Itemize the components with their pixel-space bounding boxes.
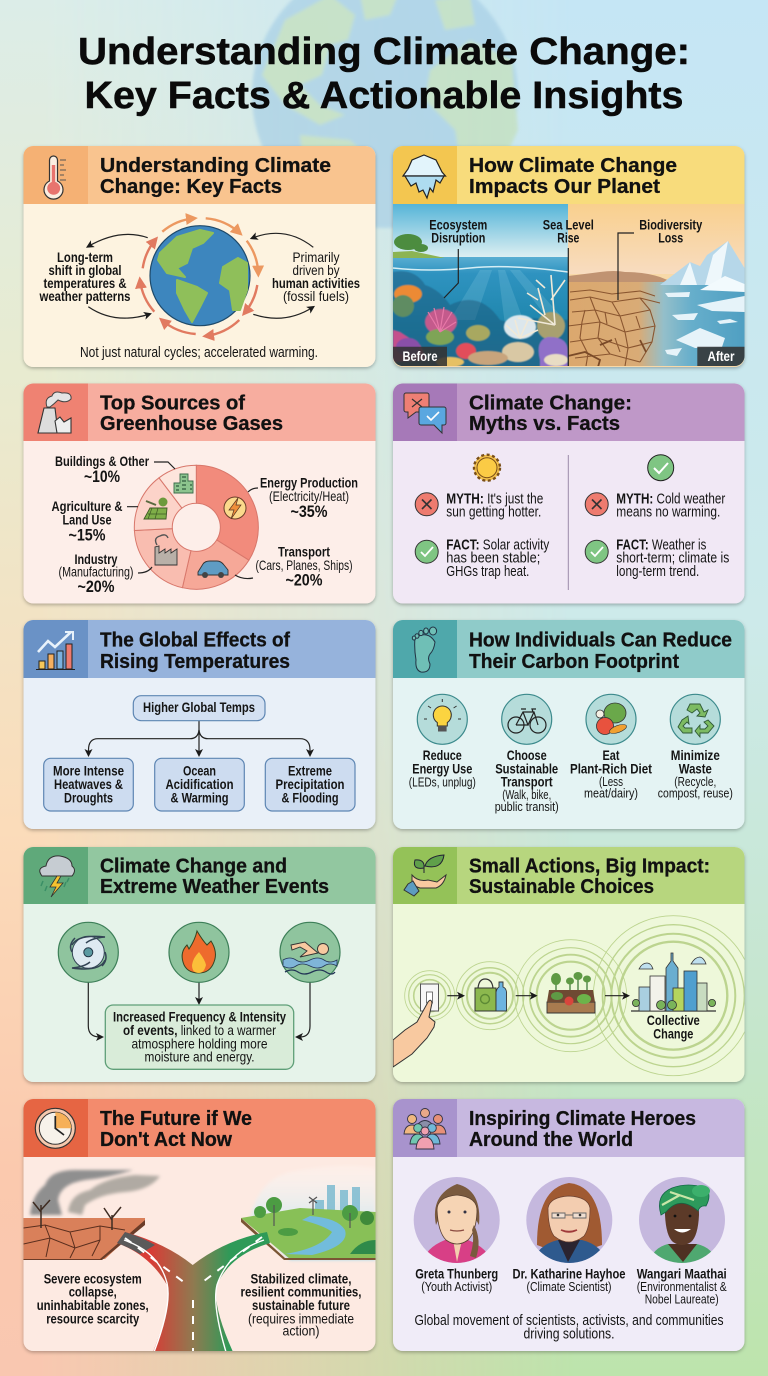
callout: frequency and intensity: atmosphere holding more (132, 1035, 268, 1051)
header: How Climate Change (469, 155, 677, 177)
label: buildings: Buildings & Other (55, 453, 149, 469)
scene: degraded future (24, 1170, 160, 1260)
text: bad outcome: collapse, (69, 1284, 117, 1300)
myth 1: MYTH: It's just the (446, 490, 543, 507)
label: collective change (647, 1012, 700, 1041)
box: ocean: Ocean (183, 763, 216, 779)
box: ocean: Acidification (166, 776, 234, 792)
divider (567, 455, 569, 590)
arrows (447, 995, 628, 997)
labels: before and after (402, 348, 735, 364)
box: precipitation: & Flooding (282, 789, 338, 805)
header (24, 146, 376, 204)
action: transport: Sustainable (495, 760, 558, 776)
icon: clock (35, 1108, 75, 1148)
icon: flood swimmer (280, 922, 340, 982)
icon: storm cloud (40, 856, 74, 897)
header (393, 847, 744, 904)
box: precipitation: Precipitation (276, 776, 344, 792)
text: good outcome: sustainable future (252, 1297, 350, 1313)
icon: hand with plant (404, 855, 446, 896)
label: industry: ~20% (78, 578, 115, 596)
portrait: Katharine Hayhoe (526, 1177, 612, 1263)
box: ocean (155, 758, 244, 811)
before and after scene (392, 204, 745, 367)
box: ocean: & Warming (170, 789, 228, 805)
text: definition: shift in global (48, 262, 122, 278)
panel: the future if we don't act now (24, 1099, 376, 1352)
header: Their Carbon Footprint (469, 651, 679, 673)
text: bad outcome: resource scarcity (46, 1310, 139, 1326)
scene: sustainable future (241, 1179, 376, 1262)
box: heatwaves: Droughts (64, 789, 113, 805)
action: diet: (Less (599, 774, 623, 789)
labels: scene callouts: Ecosystem (429, 216, 487, 232)
label: energy: (Electricity/Heat) (269, 488, 349, 504)
header: The Global Effects of (100, 630, 290, 652)
header: Impacts Our Planet (469, 176, 660, 198)
header: Myths vs. Facts (469, 413, 620, 435)
label: buildings: ~10% (84, 468, 120, 486)
text: global movement note (414, 1313, 724, 1342)
icon: wildfire (169, 922, 229, 982)
text: note: Not just natural cycles; accelerated warming. (80, 345, 318, 361)
icon: city (631, 953, 716, 1011)
panel: how climate change impacts our planet (392, 146, 745, 367)
action: diet: meat/dairy) (584, 786, 638, 801)
labels: scene callouts: Biodiversity (639, 216, 702, 232)
text: drivers (272, 249, 360, 304)
action: diet (570, 694, 652, 801)
header (393, 146, 744, 204)
fact 1: GHGs trap heat. (446, 563, 529, 580)
fact 2: short-term; climate is (616, 550, 729, 567)
action: transport (495, 694, 559, 814)
action: waste (658, 694, 733, 801)
label: transport: ~20% (286, 572, 323, 590)
action: energy: (LEDs, unplug) (409, 775, 476, 790)
text: definition: temperatures & (44, 275, 126, 291)
header: Rising Temperatures (100, 651, 290, 673)
hero names: (Environmentalist & (637, 1279, 727, 1294)
action: diet: Eat (602, 747, 620, 763)
panel: understanding climate change key facts (24, 146, 376, 367)
road fork (117, 1232, 270, 1352)
action: energy: Energy Use (412, 760, 472, 776)
panel: global effects of rising temperatures (24, 620, 376, 829)
labels: scene callouts: Rise (557, 230, 579, 246)
text: definition: weather patterns (39, 288, 131, 304)
icon: rising chart (36, 632, 75, 670)
title: Key Facts & Actionable Insights (84, 75, 684, 117)
action: diet: Plant-Rich Diet (570, 760, 652, 776)
panel: reduce carbon footprint (393, 620, 744, 829)
hero names: Greta Thunberg (415, 1265, 498, 1281)
hero names: Nobel Laureate) (645, 1291, 719, 1306)
labels: scene callouts: Sea Level (543, 216, 594, 232)
portrait: Greta Thunberg (414, 1177, 500, 1263)
donut leader lines (127, 462, 258, 579)
header: Extreme Weather Events (100, 876, 329, 898)
panel: myths vs facts (393, 384, 744, 604)
text: good outcome: (requires immediate (248, 1310, 354, 1326)
header: Small Actions, Big Impact: (469, 855, 710, 877)
icon: sun (474, 455, 500, 481)
header: Inspiring Climate Heroes (469, 1108, 696, 1130)
hero names: Dr. Katharine Hayhoe (512, 1265, 626, 1281)
text: good outcome (240, 1270, 362, 1339)
text: bad outcome: uninhabitable zones, (37, 1297, 149, 1313)
fact 2: long-term trend. (616, 563, 699, 580)
label: agriculture (52, 498, 122, 545)
header (24, 620, 376, 678)
fact 2: FACT: Weather is (616, 536, 706, 553)
label: industry: Industry (74, 551, 118, 567)
text: drivers: Primarily (292, 249, 340, 265)
text: bad outcome: Severe ecosystem (44, 1270, 142, 1286)
text: good outcome: resilient communities, (240, 1284, 362, 1300)
header (393, 620, 744, 678)
label: energy: ~35% (290, 503, 328, 521)
callout: frequency and intensity: moisture and energy. (144, 1049, 254, 1065)
icon: community (404, 1108, 446, 1149)
text: drivers: driven by (292, 262, 340, 278)
box: heatwaves: More Intense (53, 763, 124, 779)
label: industry: (Manufacturing) (58, 564, 134, 580)
globe with warming cycle arrows (88, 218, 313, 336)
label: transport (256, 544, 352, 590)
label: agriculture: Land Use (62, 511, 112, 527)
box: higher global temps: Higher Global Temps (143, 699, 255, 715)
icon: bag and bottle (475, 979, 506, 1011)
action: transport: Transport (501, 774, 553, 790)
icon: light switch with hand (393, 984, 438, 1067)
text: definition (39, 249, 131, 304)
title (78, 31, 690, 117)
header: Climate Change: (469, 392, 632, 414)
header: How Individuals Can Reduce (469, 630, 732, 652)
myth 2: means no warming. (616, 504, 720, 521)
text: definition: Long-term (57, 249, 113, 265)
icon: iceberg (403, 155, 446, 198)
text: good outcome: Stabilized climate, (250, 1270, 352, 1286)
header (24, 1099, 376, 1157)
icon: factory (38, 392, 71, 433)
text: drivers: (fossil fuels) (283, 288, 349, 304)
action: transport: public transit) (495, 799, 559, 814)
label: collective change: Change (653, 1025, 693, 1041)
header: Change: Key Facts (100, 176, 282, 198)
action: transport: (Walk, bike, (502, 787, 551, 802)
action: energy: Reduce (423, 747, 462, 763)
label: agriculture: Agriculture & (52, 498, 122, 514)
icon: footprint (412, 627, 437, 672)
hero names: (Climate Scientist) (526, 1279, 612, 1294)
icon: check circle (648, 455, 674, 481)
labels: scene callouts: Disruption (431, 230, 485, 246)
label: transport: Transport (278, 544, 330, 560)
header (24, 384, 376, 441)
action: waste: Minimize (671, 747, 720, 763)
label: collective change: Collective (647, 1012, 700, 1028)
text: good outcome: action) (282, 1323, 320, 1339)
header: Sustainable Choices (469, 876, 654, 898)
text: bad outcome (37, 1270, 149, 1326)
ripple rings (405, 916, 753, 1076)
myth 2: MYTH: Cold weather (616, 490, 725, 507)
icon: vegetable garden (547, 972, 595, 1013)
label: agriculture: ~15% (68, 527, 106, 545)
fact 1: FACT: Solar activity (446, 536, 550, 553)
panel: small actions big impact (393, 847, 753, 1082)
donut icons (144, 474, 246, 578)
flow arrows (88, 982, 310, 1037)
hero names: (Youth Activist) (421, 1279, 492, 1294)
title: Understanding Climate Change: (78, 31, 690, 73)
header: Climate Change and (100, 855, 287, 877)
myth 2 (585, 490, 725, 521)
icon: thermometer (44, 156, 66, 199)
action: transport: Choose (507, 747, 547, 763)
action: waste: (Recycle, (674, 774, 716, 789)
label: buildings (55, 453, 149, 486)
myth 1: sun getting hotter. (446, 504, 541, 521)
header: Don't Act Now (100, 1129, 232, 1151)
label: energy (260, 475, 358, 521)
panel: extreme weather events (24, 847, 376, 1082)
fact 1 (415, 536, 550, 580)
box: precipitation: Extreme (288, 763, 332, 779)
myth 1 (415, 490, 543, 521)
box: higher global temps (133, 696, 265, 721)
header: Understanding Climate (100, 155, 331, 177)
icon: hurricane (58, 922, 118, 982)
callout: frequency and intensity: Increased Frequency & Intensity (113, 1009, 286, 1025)
header: Around the World (469, 1129, 633, 1151)
labels: before and after: Before (402, 348, 438, 364)
header: Greenhouse Gases (100, 413, 283, 435)
panel: climate heroes (393, 1099, 744, 1351)
background globe (252, 0, 518, 228)
header (393, 384, 744, 441)
icon: speech bubbles (404, 393, 446, 433)
header (393, 1099, 744, 1157)
callout: frequency and intensity: of events, linked to a warmer (123, 1022, 276, 1038)
box: precipitation (265, 758, 355, 811)
fact 1: has been stable; (446, 550, 540, 567)
donut chart (134, 465, 258, 589)
box: heatwaves (44, 758, 133, 811)
flow arrows (88, 721, 310, 755)
panel: top sources of greenhouse gases (24, 384, 376, 604)
text: drivers: human activities (272, 275, 360, 291)
labels: scene callouts (429, 216, 702, 246)
header: Top Sources of (100, 392, 245, 414)
action: waste: Waste (679, 760, 712, 776)
label: industry (58, 551, 134, 596)
fact 2 (585, 536, 729, 580)
label: energy: Energy Production (260, 475, 358, 491)
label: transport: (Cars, Planes, Ships) (256, 557, 352, 573)
callout: frequency and intensity (105, 1005, 294, 1069)
labels: before and after: After (708, 348, 735, 364)
action: waste: compost, reuse) (658, 786, 733, 801)
labels: scene callouts: Loss (658, 230, 683, 246)
text: global movement note: driving solutions. (524, 1326, 614, 1342)
action: energy (409, 694, 476, 790)
header: The Future if We (100, 1108, 252, 1130)
hero names (415, 1265, 727, 1306)
header (24, 847, 376, 904)
hero names: Wangari Maathai (637, 1265, 727, 1281)
portrait: Wangari Maathai (639, 1177, 725, 1263)
box: heatwaves: Heatwaves & (54, 776, 123, 792)
